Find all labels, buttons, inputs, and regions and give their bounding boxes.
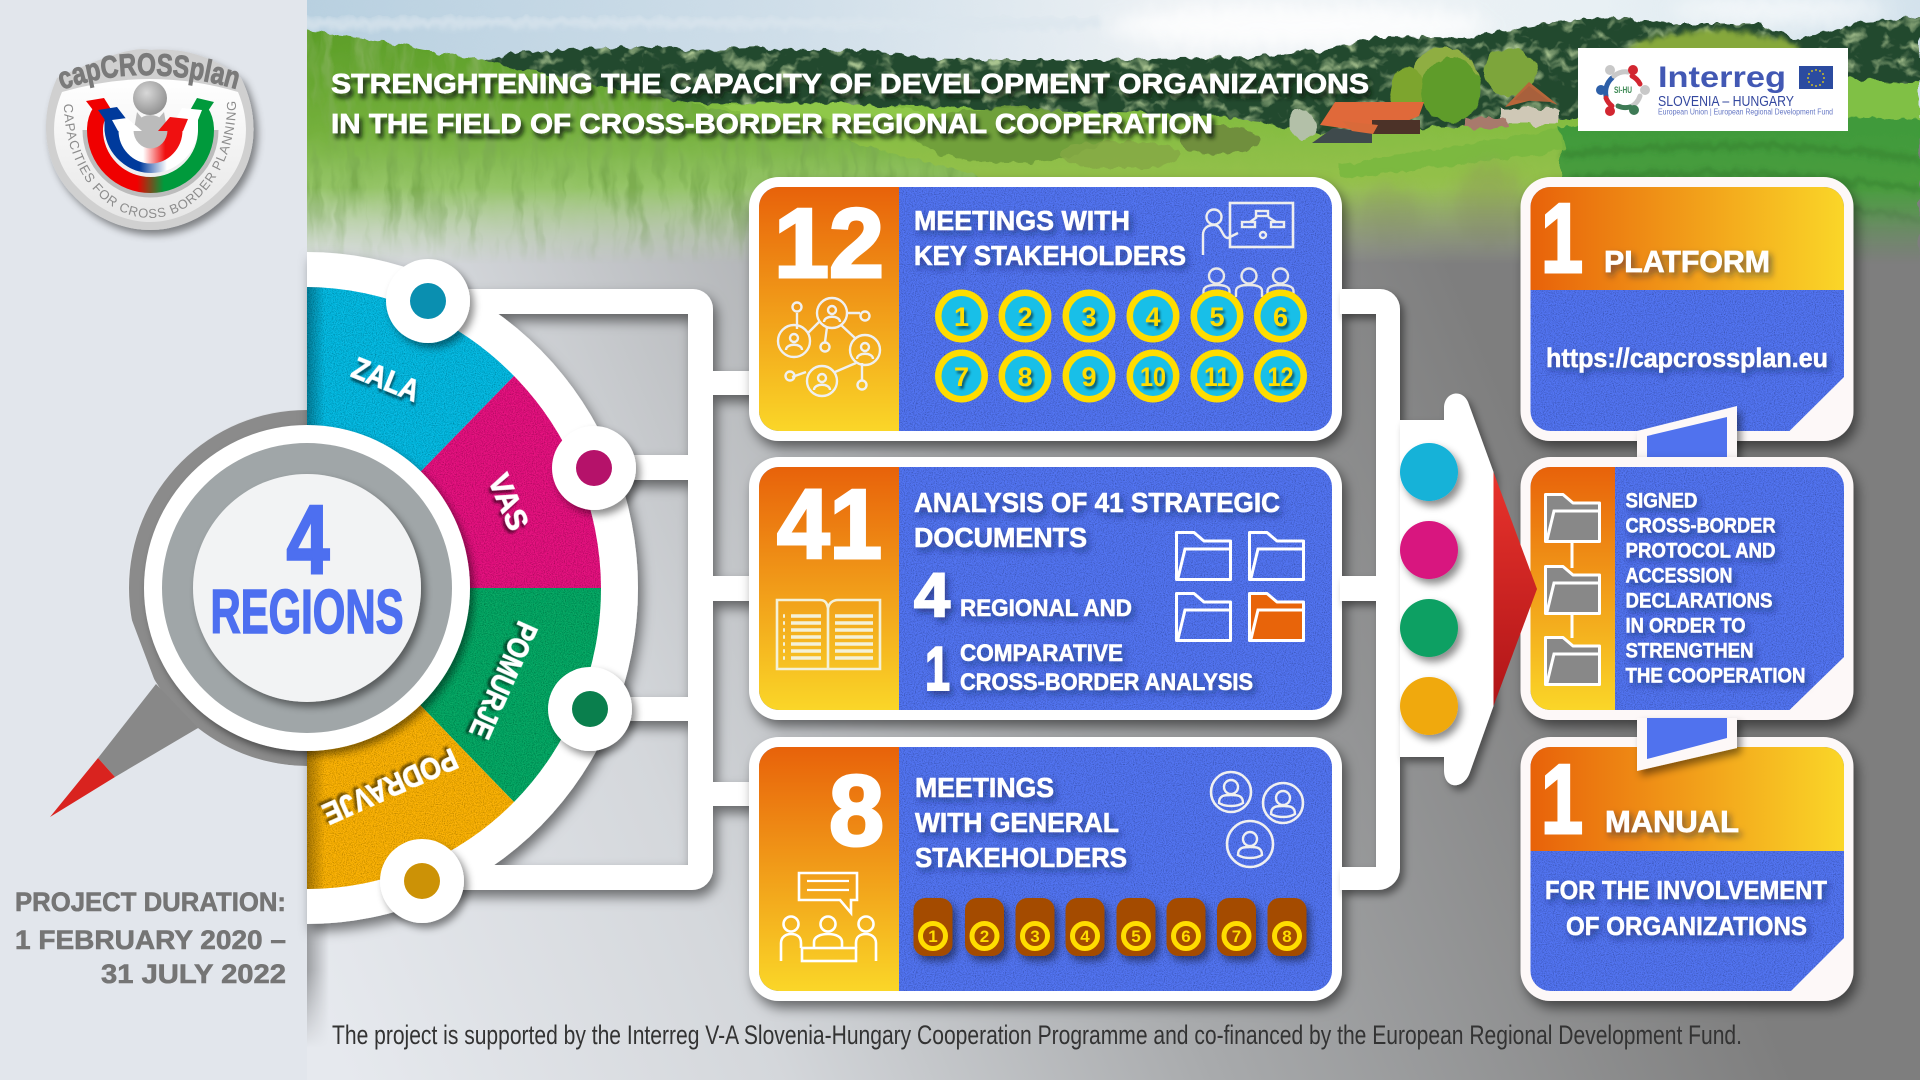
icon: linked folders: [1546, 494, 1600, 684]
EU flag: [1799, 66, 1833, 89]
wedge: Podravje: [307, 588, 514, 889]
title: IN THE FIELD OF CROSS-BORDER REGIONAL COOPERATION: [331, 108, 1213, 139]
heading: [914, 205, 1186, 271]
project duration: 31 JULY 2022: [101, 959, 286, 989]
comparative analysis: COMPARATIVE: [960, 640, 1123, 667]
heading: ANALYSIS OF 41 STRATEGIC: [914, 487, 1280, 518]
numbered circles: 10: [1140, 362, 1166, 392]
protocol text: ACCESSION: [1626, 564, 1732, 588]
region dots: [1400, 443, 1458, 735]
icon: presenter and audience: [1203, 203, 1294, 297]
icon: open book: [777, 600, 880, 669]
wedge: Pomurje: POMURJE: [462, 617, 545, 744]
wedge: Vas: VAS: [481, 468, 536, 535]
Interreg logo: SLOVENIA – HUNGARY: [1658, 93, 1794, 110]
icon: folders: [1176, 532, 1304, 640]
left panel: [0, 0, 307, 1080]
panel edge shadow: [307, 924, 326, 1040]
numbered circles: 9: [1081, 362, 1097, 392]
numbered meeting tabs: 2: [980, 927, 989, 946]
logo arrows: [85, 81, 216, 195]
magnifier: 4 regions: REGIONS: [210, 578, 404, 647]
project duration: [15, 887, 286, 989]
panel: 12 meetings with key stakeholders: [749, 177, 1342, 441]
heading: MEETINGS: [915, 772, 1054, 803]
manual text: OF ORGANIZATIONS: [1566, 911, 1807, 941]
heading: DOCUMENTS: [914, 522, 1087, 553]
logo ring text: CAPACITIES FOR CROSS BORDER PLANNING: [64, 102, 236, 218]
protocol text: THE COOPERATION: [1626, 664, 1806, 688]
protocol text: IN ORDER TO: [1626, 614, 1746, 638]
icon: general stakeholders: [1211, 772, 1303, 867]
numbered meeting tabs: 4: [1080, 927, 1090, 946]
numbered circles: [935, 290, 1307, 402]
icon: meeting table: [781, 873, 876, 961]
title: [331, 68, 1369, 139]
numbered circles: 3: [1081, 302, 1097, 332]
landscape photo header: [307, 0, 1920, 259]
connector node: Pomurje: [548, 667, 632, 751]
protocol text: SIGNED: [1626, 490, 1698, 512]
ribbon: platform to protocol: [1637, 406, 1737, 460]
numbered circles: 11: [1204, 362, 1230, 392]
protocol text: DECLARATIONS: [1626, 590, 1772, 612]
Interreg logo: European Union | European Regional Development Fund: [1658, 108, 1833, 116]
number 8: 8: [829, 755, 884, 867]
heading: MEETINGS WITH: [914, 205, 1130, 236]
connector node: Zala: [386, 259, 470, 343]
capCROSSplan logo: [45, 49, 262, 240]
magnifier: 4 regions: 4: [286, 485, 330, 594]
icon: people network: [778, 298, 880, 396]
magnifier dark outer ring: [129, 410, 485, 766]
numbered circles: 8: [1017, 362, 1033, 392]
wedge: Zala: [307, 287, 514, 588]
ribbon: protocol to manual: [1637, 718, 1737, 771]
heading: platform: PLATFORM: [1604, 244, 1770, 279]
heading: [914, 487, 1280, 704]
heading: KEY STAKEHOLDERS: [914, 240, 1186, 271]
comparative analysis: CROSS-BORDER ANALYSIS: [960, 669, 1253, 696]
protocol text: CROSS-BORDER: [1626, 514, 1776, 538]
comparative analysis: [925, 635, 1253, 704]
numbered meeting tabs: 6: [1181, 927, 1191, 946]
panel: 8 meetings with general stakeholders: [749, 737, 1342, 1001]
connectors and wheel rim: [307, 252, 755, 924]
title: STRENGHTENING THE CAPACITY OF DEVELOPMENT ORGANIZATIONS: [331, 68, 1369, 99]
numbered meeting tabs: 8: [1282, 927, 1292, 946]
heading: [915, 772, 1127, 873]
SI-HU ring: [1598, 68, 1648, 114]
numbered circles: 2: [1017, 302, 1033, 332]
magnifier: 4 regions: [144, 425, 470, 751]
number 1: 1: [1541, 744, 1583, 854]
link: https://capcrossplan.eu: [1546, 343, 1828, 373]
regional analyses: REGIONAL AND: [960, 595, 1132, 622]
logo wordmark: [59, 52, 239, 90]
heading: WITH GENERAL: [915, 807, 1119, 838]
numbered meeting tabs: 3: [1030, 927, 1040, 946]
regional analyses: 4: [914, 561, 951, 630]
number 12: 12: [774, 188, 884, 298]
heading: STAKEHOLDERS: [915, 842, 1127, 873]
panel: 1 manual: [1520, 737, 1854, 1001]
numbered circles: 7: [954, 362, 969, 392]
manual text: FOR THE INVOLVEMENT: [1545, 875, 1827, 905]
manual text: [1545, 875, 1827, 941]
panel: signed protocol: [1520, 457, 1854, 720]
edge shade on wedges: [307, 287, 325, 889]
comparative analysis: 1: [925, 635, 950, 704]
panel: 41 strategic documents: [749, 457, 1342, 720]
farm buildings: [1312, 82, 1558, 143]
region wheel: [307, 287, 601, 889]
wedge: Zala: ZALA: [347, 350, 425, 409]
wedge: Vas: [307, 376, 601, 588]
connector node: Podravje: [380, 839, 464, 923]
number 1: 1: [1541, 183, 1583, 293]
wedge: Podravje: PODRAVJE: [317, 741, 463, 832]
wedge: Pomurje: [307, 588, 601, 802]
Interreg logo: [1578, 48, 1848, 131]
numbered circles: 5: [1209, 302, 1225, 332]
big arrow with region dots: [1400, 393, 1494, 785]
number 41: 41: [777, 469, 882, 579]
Interreg logo: SI-HU: [1614, 85, 1632, 95]
protocol text: [1626, 490, 1806, 688]
numbered meeting tabs: 7: [1232, 927, 1241, 946]
Interreg logo: Interreg: [1658, 61, 1786, 94]
connector node: Vas: [552, 426, 636, 510]
logo wordmark: capCROSSplan: [59, 52, 239, 90]
magnifier handle: [50, 684, 198, 817]
numbered circles: 6: [1273, 302, 1288, 332]
connectors to arrow: [1340, 289, 1400, 890]
numbered meeting tabs: 1: [928, 927, 938, 946]
project duration: PROJECT DURATION:: [15, 887, 286, 917]
numbered circles: 1: [954, 302, 969, 332]
regional analyses: [914, 561, 1132, 630]
numbered circles: 12: [1268, 362, 1294, 392]
protocol text: PROTOCOL AND: [1626, 540, 1776, 562]
numbered meeting tabs: 5: [1131, 927, 1141, 946]
arrow tip: [1494, 472, 1537, 706]
numbered meeting tabs: [914, 898, 1306, 956]
project duration: 1 FEBRUARY 2020 –: [15, 925, 286, 955]
heading: manual: MANUAL: [1605, 804, 1739, 839]
numbered circles: 4: [1145, 302, 1161, 332]
protocol text: STRENGTHEN: [1626, 640, 1754, 662]
panel: 1 platform: [1520, 177, 1854, 441]
